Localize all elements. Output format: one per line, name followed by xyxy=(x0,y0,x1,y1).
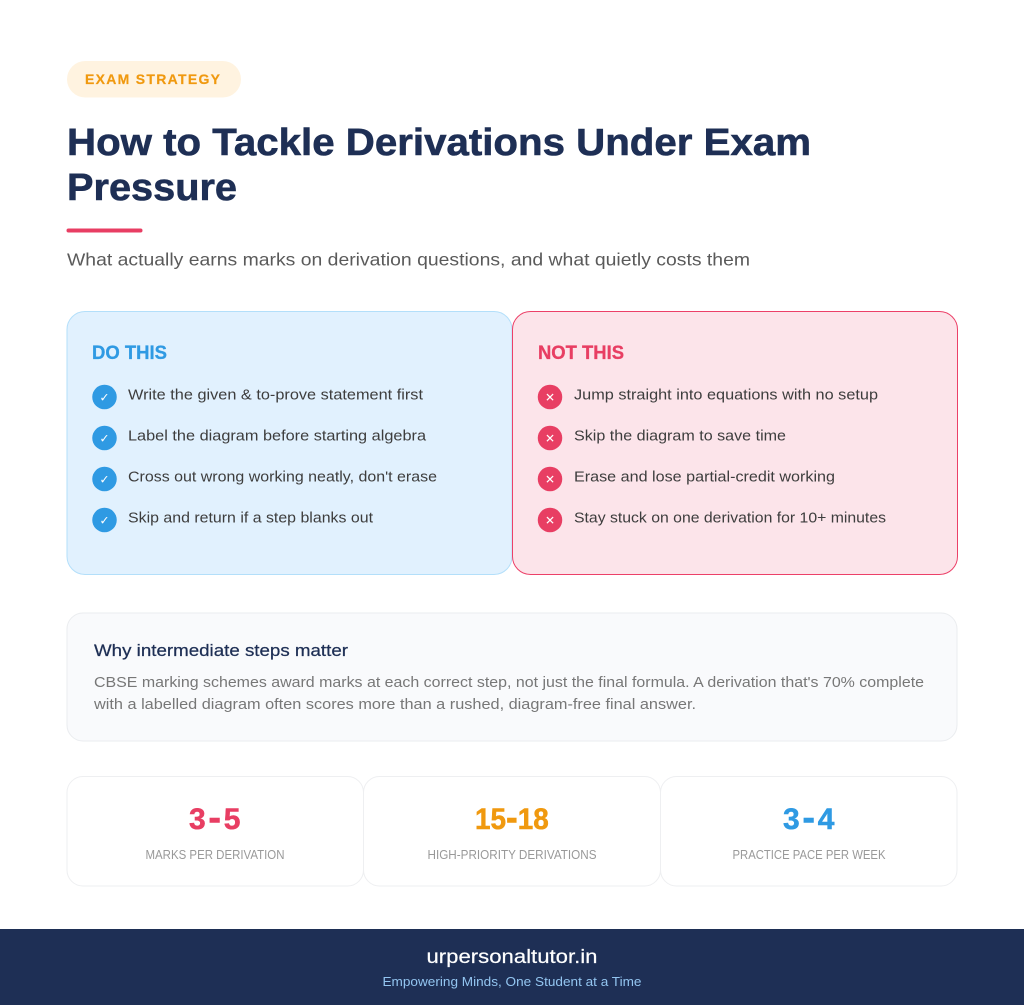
title: Pressure xyxy=(67,167,237,209)
item: write the given: ✓ xyxy=(99,390,110,404)
stat card: practice pace per week: - xyxy=(802,797,818,839)
item: skip and return xyxy=(92,508,374,532)
item: cross out: Cross out wrong working neatly, don't erase xyxy=(128,468,437,486)
item: stay stuck: Stay stuck on one derivation for 10+ minutes xyxy=(574,510,886,526)
item: erase: ✕ xyxy=(545,472,555,486)
item: cross out: ✓ xyxy=(99,472,110,486)
stat card: high-priority derivations: 18 xyxy=(518,803,549,836)
stat card: practice pace per week: PRACTICE PACE PER WEEK xyxy=(732,848,886,862)
item: jump straight xyxy=(538,385,878,409)
item: label the diagram xyxy=(92,426,427,450)
callout body: CBSE marking schemes award marks at each correct step, not just the final formula. A derivation that's 70% complete xyxy=(94,675,924,691)
stat card: marks per derivation: MARKS PER DERIVATION xyxy=(146,848,284,862)
badge: exam strategy: EXAM STRATEGY xyxy=(85,71,221,87)
stat card: marks per derivation: - xyxy=(208,797,224,839)
stat card: marks per derivation: 5 xyxy=(224,803,243,836)
panel: not this xyxy=(512,312,958,574)
stat card: high-priority derivations: HIGH-PRIORITY DERIVATIONS xyxy=(428,848,596,862)
item: write the given: Write the given & to-prove statement first xyxy=(128,386,424,404)
stat card: high-priority derivations: 15 xyxy=(475,803,506,836)
footer site name: urpersonaltutor.in xyxy=(426,947,598,968)
item: skip the diagram xyxy=(538,426,786,450)
item: stay stuck: ✕ xyxy=(545,514,555,528)
stat card: marks per derivation xyxy=(67,776,364,886)
callout body: with a labelled diagram often scores more than a rushed, diagram-free final answer. xyxy=(93,697,696,713)
item: erase xyxy=(538,467,835,491)
callout heading: Why intermediate steps matter xyxy=(94,641,348,660)
item: skip the diagram: Skip the diagram to save time xyxy=(574,428,786,444)
stat card: high-priority derivations: - xyxy=(506,796,518,838)
item: label the diagram: Label the diagram before starting algebra xyxy=(128,428,427,444)
footer xyxy=(0,929,1024,1005)
footer tagline: Empowering Minds, One Student at a Time xyxy=(382,974,642,989)
stat card: marks per derivation: 3 xyxy=(189,803,208,836)
item: stay stuck xyxy=(538,508,886,532)
item: label the diagram: ✓ xyxy=(99,432,110,446)
stat card: practice pace per week: 4 xyxy=(818,803,837,836)
item: skip and return: Skip and return if a step blanks out xyxy=(128,510,374,526)
item: write the given xyxy=(92,385,424,409)
title xyxy=(67,122,811,209)
stat card: practice pace per week xyxy=(660,776,957,886)
panel: do this xyxy=(67,312,512,574)
item: cross out xyxy=(92,467,437,491)
item: skip and return: ✓ xyxy=(99,514,110,528)
stat card: high-priority derivations xyxy=(364,776,660,886)
title underline xyxy=(66,228,142,232)
panel: why intermediate steps matter xyxy=(67,613,957,741)
heading: not this: NOT THIS xyxy=(538,343,624,364)
callout body xyxy=(93,675,924,713)
badge: exam strategy xyxy=(67,61,241,98)
subtitle: What actually earns marks on derivation questions, and what quietly costs them xyxy=(67,250,750,270)
item: erase: Erase and lose partial-credit working xyxy=(574,468,835,486)
heading: do this: DO THIS xyxy=(92,343,167,364)
item: jump straight: ✕ xyxy=(545,390,555,404)
title: How to Tackle Derivations Under Exam xyxy=(67,122,811,164)
item: skip the diagram: ✕ xyxy=(545,432,555,446)
stat card: practice pace per week: 3 xyxy=(783,803,802,836)
item: jump straight: Jump straight into equations with no setup xyxy=(574,386,878,404)
